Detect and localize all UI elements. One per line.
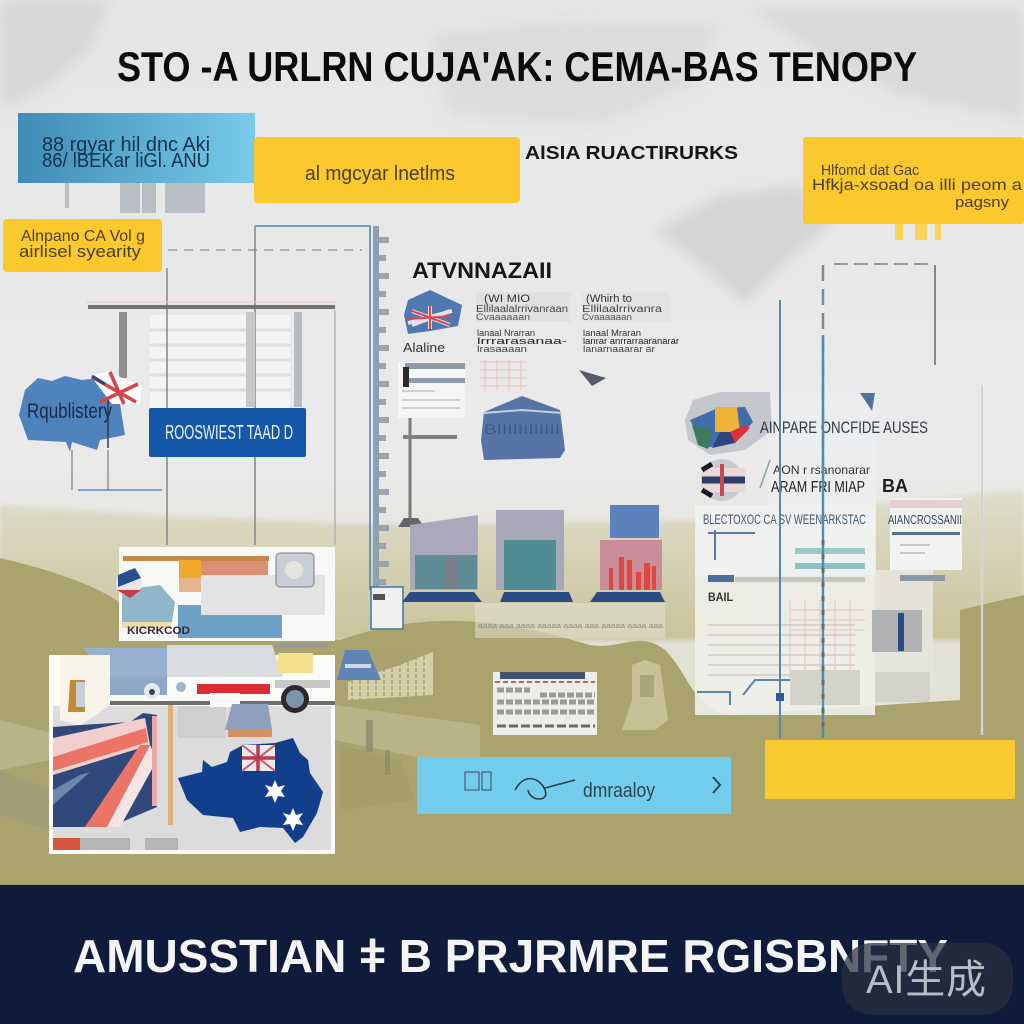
text: BAIL label: BAIL [708, 590, 733, 604]
vertical tick strip [371, 226, 403, 629]
panel: yellow box left [3, 219, 162, 272]
text block: first column: Cvaaaaaan [476, 312, 530, 322]
bar chart: centre teal [496, 510, 573, 602]
icon: pointer triangle [579, 370, 606, 386]
icon: blue tag [337, 650, 381, 680]
olive landscape [0, 558, 1024, 885]
panel: blue header box [18, 113, 255, 213]
panel: blue header box: 88 rgyar hil dnc Aki [42, 134, 210, 156]
panel: yellow heading box: al mgcyar lnetlms [305, 163, 455, 185]
text block: right sub-heading: AON r rsanonarar [773, 463, 870, 477]
guide lines over right panel [776, 264, 982, 738]
text block: first column: Ellilaalalrrivanraan [476, 304, 568, 315]
label: BA: BA [882, 476, 908, 496]
icon: union flag [53, 713, 178, 850]
heading: centre section: ATVNNAZAII [412, 258, 552, 283]
icon: flag circle [701, 459, 745, 501]
watermark badge [842, 943, 1013, 1015]
icon: flag badge: Alaline [403, 340, 445, 355]
icon: flag badge [403, 290, 462, 355]
panel: yellow banner [765, 740, 1015, 799]
text block: first column: lrasaaaan [477, 344, 527, 354]
text block: first column: lanaal Nrarran [477, 328, 535, 338]
icon: blue blob badge with flag [19, 372, 142, 452]
text block: right sub-heading [760, 460, 870, 496]
panel: cyan banner: dmraaloy [583, 780, 655, 802]
text block: second column: Ellilaalrrivanra [582, 304, 663, 315]
panel: footer band: AMUSSTIAN ǂ B PRJRMRE RGISBNFTY [73, 930, 948, 982]
watermark badge: AI生成 [866, 958, 986, 1002]
panel: blue header box: 86/ lBEKar liGl. ANU [42, 150, 210, 172]
icon: blue dome: BIIIIIIIIIIII [484, 421, 560, 437]
panel: dark blue button [149, 408, 306, 457]
panel: upper left card: KICRKCOD [127, 625, 190, 637]
heading: right section: AINPARE ONCFIDE AUSES [760, 418, 928, 437]
panel: yellow box right: pagsny [955, 194, 1010, 211]
icon: tan arch [622, 660, 668, 730]
icon: blue blob badge with flag: Rqublistery [27, 400, 112, 423]
title: STO -A URLRN CUJA'AK: CEMA-BAS TENOPY [117, 43, 917, 90]
heading: top centre label: AlSIA RUACTIRURKS [525, 143, 738, 163]
text block: first column: lrrrarasanaa- [477, 336, 567, 346]
icon: colour pie blob [685, 392, 772, 455]
panel: map and flag card [49, 643, 335, 854]
small table [480, 360, 526, 390]
bar chart: left teal [402, 515, 482, 602]
card: central small table [493, 672, 597, 735]
panel: yellow box right: Hfkja-xsoad oa illi peom a [812, 177, 1022, 194]
caption strip below charts: aaaa aaa aaaa aaaaa aaaa aaa aaaaa aaaa aaa [478, 623, 663, 630]
card with stand [398, 362, 465, 527]
icon: triangle marker [860, 393, 875, 411]
card: right mini card: AIANCROSSANII [888, 512, 962, 527]
icon: blue dome [481, 396, 565, 460]
panel: yellow box right: Hlfomd dat Gac [821, 162, 919, 179]
panel: yellow box left: Alnpano CA Vol g [21, 228, 145, 245]
panel: dark blue button: ROOSWIEST TAAD D [165, 422, 293, 444]
text block: second column: lanarnaaarar ar [583, 344, 655, 354]
text: row label left: BLECTOXOC CA SV WEENARKSTAC [703, 511, 866, 527]
panel: upper left card [116, 547, 335, 641]
text block: second column: (Whirh to [586, 293, 632, 305]
text block: first column: (WI MIO [484, 293, 530, 305]
panel: yellow box left: airlisel syearity [19, 242, 142, 261]
icon: Australia map [178, 738, 323, 843]
panel: right report sheet [695, 393, 945, 715]
panel: yellow box right [803, 137, 1024, 240]
text block: second column: lanrar anrrarraaranarar [583, 336, 679, 346]
caption strip below charts [475, 603, 665, 638]
card: right mini card [888, 498, 962, 570]
panel: left frame diagram [72, 226, 370, 590]
panel: footer band [0, 885, 1024, 1024]
panel: yellow heading box [254, 137, 520, 203]
text block: second column: lanaal Mraran [583, 328, 641, 338]
panel: cyan banner [417, 757, 731, 814]
text block: right sub-heading: ARAM FRI MIAP [771, 479, 865, 496]
bar chart: red bars [590, 505, 665, 602]
building grid illustration [348, 650, 433, 775]
text block: second column: Cvaaaaaan [582, 312, 632, 322]
text block: second column [582, 292, 679, 354]
text block: first column [476, 292, 571, 354]
